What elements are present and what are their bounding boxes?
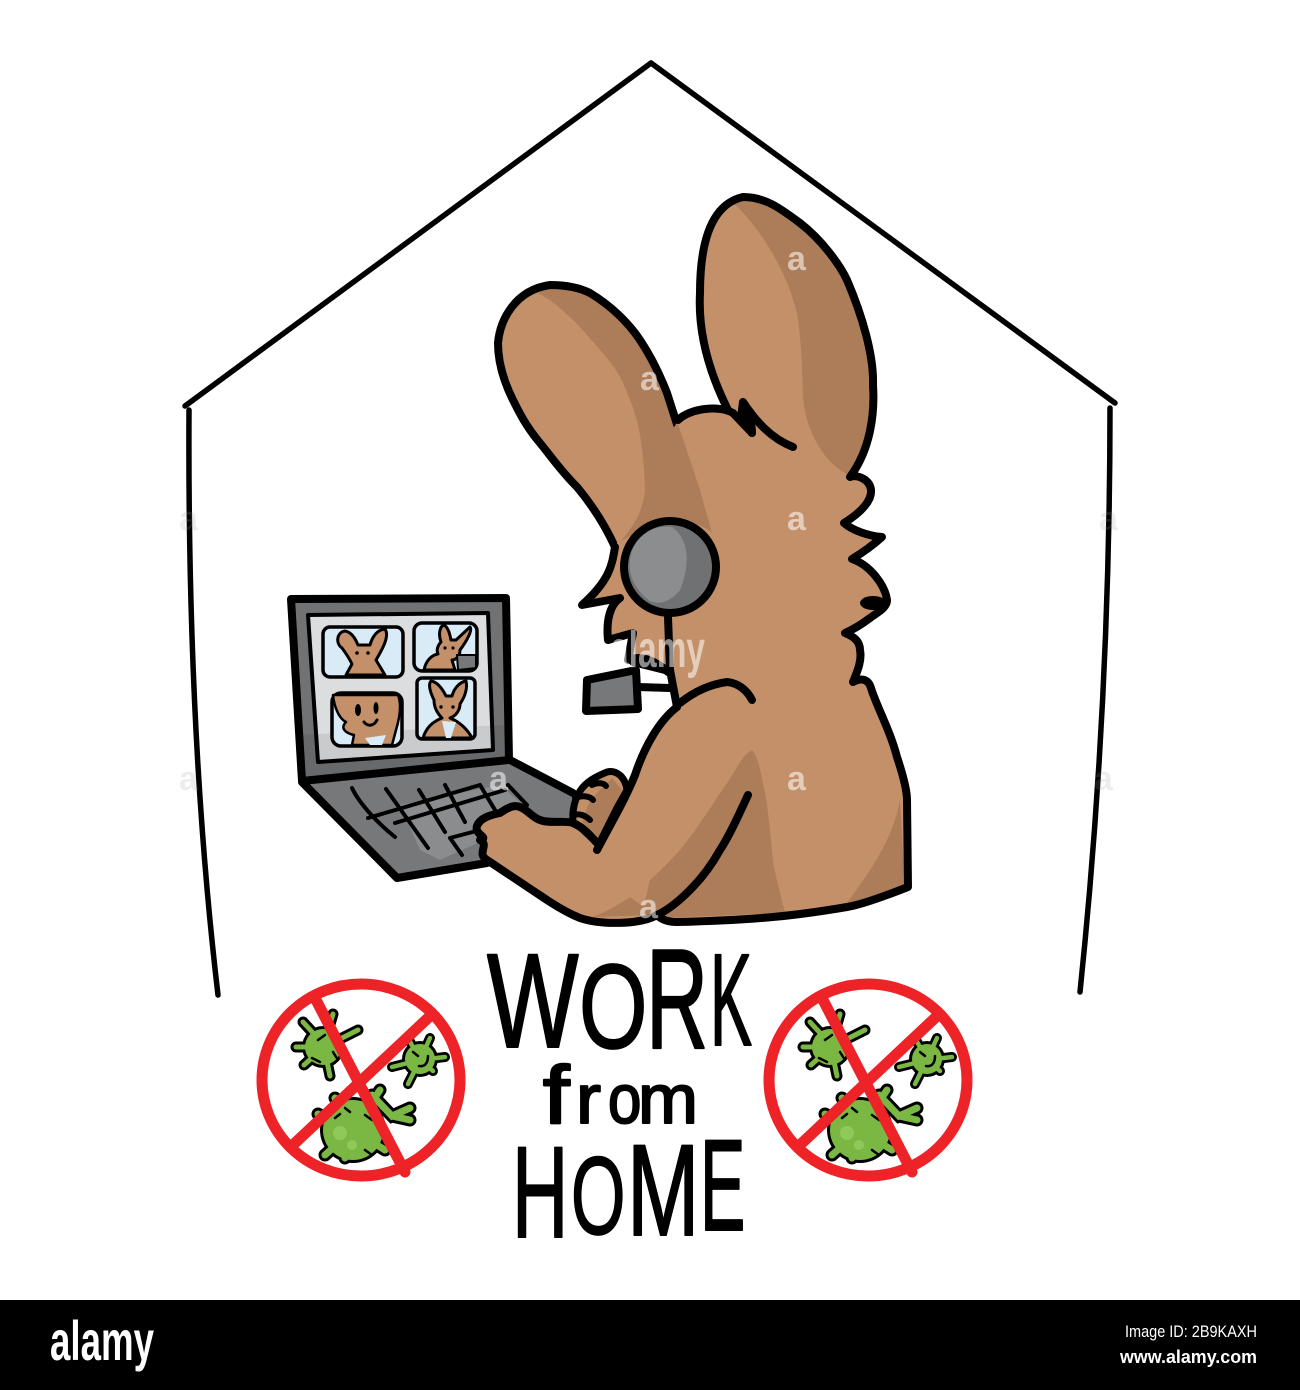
- headset microphone boom: [633, 617, 677, 707]
- house outline: [185, 63, 1115, 995]
- watermarks: a: [787, 500, 807, 538]
- no virus sign: left: [262, 984, 460, 1176]
- arm fill: [482, 812, 650, 920]
- prohibition ring and cross: [262, 984, 460, 1176]
- front ear: [498, 285, 700, 560]
- video call tile: bottom right: [417, 678, 475, 739]
- watermarks: a: [1094, 760, 1114, 798]
- word: HOME: O: [571, 1135, 625, 1258]
- word: WORK: R: [646, 920, 708, 1078]
- word: WORK: W: [487, 926, 579, 1076]
- alamy logo: alamy: [50, 1309, 154, 1372]
- word: from: r: [576, 1060, 601, 1138]
- website: www.alamy.com: [1119, 1347, 1257, 1367]
- body shading: [593, 750, 905, 918]
- word: HOME: [512, 1112, 745, 1265]
- laptop keyboard base: [302, 760, 600, 878]
- word: HOME: H: [512, 1119, 568, 1265]
- word: WORK: O: [579, 941, 647, 1074]
- watermarks: a: [179, 760, 199, 798]
- word: WORK: [487, 920, 752, 1078]
- word: from: f: [543, 1049, 570, 1141]
- video call tile: top left: [323, 627, 403, 677]
- video call tile: bottom left: [332, 693, 402, 746]
- head shading: [620, 424, 712, 542]
- virus: upper left: [296, 1014, 358, 1076]
- watermarks: a: [787, 760, 807, 798]
- headset: [586, 521, 716, 711]
- word: HOME: M: [627, 1119, 699, 1263]
- laptop screen: [291, 598, 509, 781]
- watermarks: a: [787, 240, 807, 278]
- rabbit: [477, 197, 908, 923]
- footer bar: [0, 1300, 1300, 1390]
- word: from: m: [638, 1061, 698, 1139]
- laptop: [291, 598, 600, 878]
- word: from: [543, 1049, 698, 1141]
- fur tuft: [860, 596, 886, 610]
- virus: bottom: [318, 1090, 410, 1163]
- watermarks: a: [1099, 500, 1119, 538]
- body outline: [477, 402, 908, 923]
- headset ear cup: [624, 521, 716, 613]
- title: WORK from HOME: [487, 920, 752, 1265]
- watermarks: a: [639, 888, 659, 926]
- watermarks: a: [179, 500, 199, 538]
- word: WORK: K: [710, 926, 752, 1073]
- headset microphone: [586, 670, 638, 711]
- watermarks: alamy: [610, 621, 705, 679]
- watermarks: a: [640, 360, 660, 398]
- virus: upper right: [392, 1038, 445, 1084]
- back hand: [573, 772, 627, 843]
- no virus sign: right: [769, 984, 967, 1176]
- body fill: [477, 409, 908, 923]
- word: HOME: E: [700, 1112, 745, 1258]
- back ear: [700, 197, 873, 490]
- image id: Image ID: 2B9KAXH: [1125, 1322, 1257, 1341]
- video call tile: top right: [414, 623, 477, 671]
- watermarks: a: [489, 760, 509, 798]
- watermarks: [179, 240, 1119, 926]
- word: from: o: [608, 1060, 641, 1138]
